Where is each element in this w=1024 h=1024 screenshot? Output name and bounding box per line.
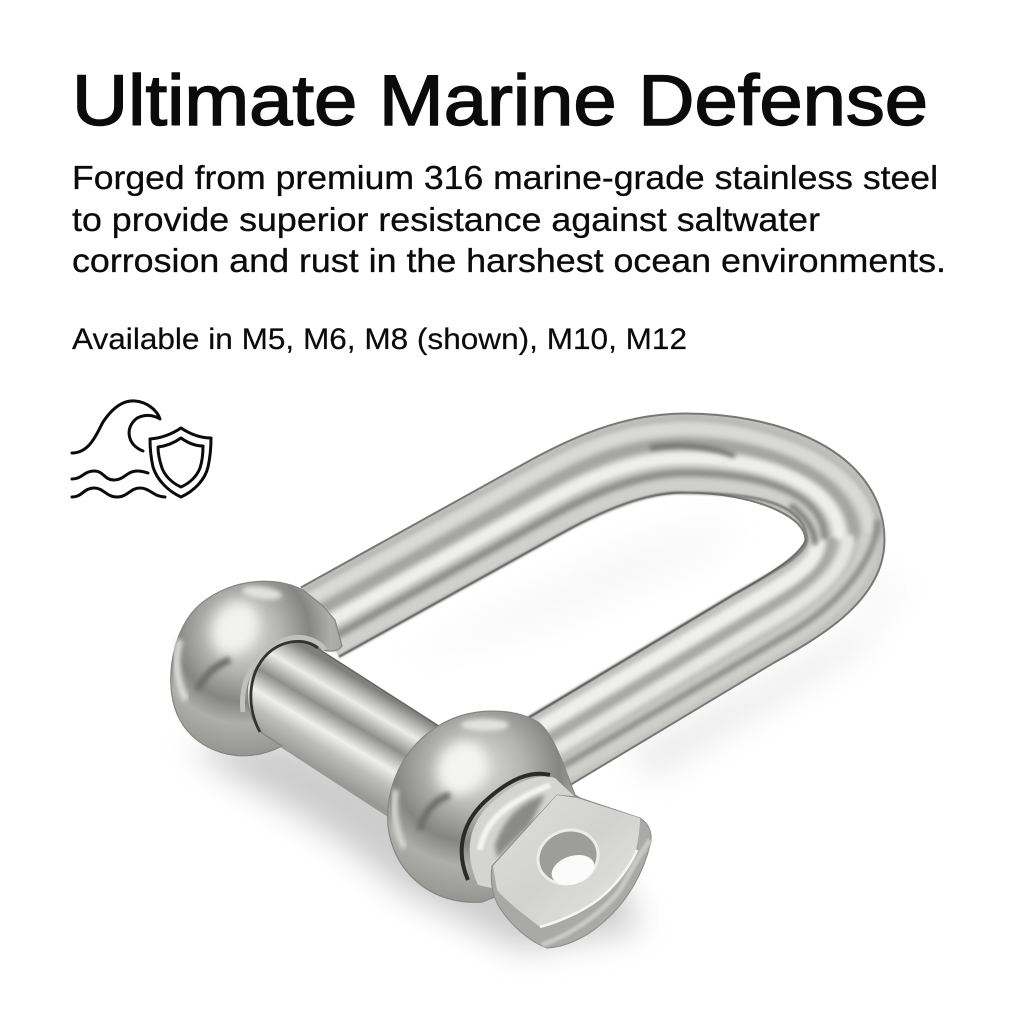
- shackle: eye plate: [491, 795, 651, 948]
- description text block: corrosion and rust in the harshest ocean environments.: [72, 242, 946, 279]
- title: Ultimate Marine Defense: [72, 62, 928, 141]
- bow inner edge: [339, 493, 807, 723]
- icon: wave and shield: [72, 401, 211, 497]
- shackle: right ball head: [388, 711, 600, 902]
- description text block: to provide superior resistance against saltwater: [72, 201, 820, 238]
- shackle cast shadow: [190, 525, 895, 950]
- shackle: threaded pin: [205, 613, 445, 817]
- description text block: [72, 159, 946, 279]
- dark ring at neck: [462, 774, 550, 880]
- available sizes: Available in M5, M6, M8 (shown), M10, M12: [72, 323, 687, 356]
- bow base tube: [320, 453, 845, 757]
- shackle: U-shaped bow: [304, 421, 878, 778]
- lower arm bands: [527, 520, 878, 778]
- shackle: left ball head: [171, 581, 342, 756]
- description text block: Forged from premium 316 marine-grade stainless steel: [72, 159, 938, 196]
- arch dark inner highlights: [650, 446, 815, 545]
- upper arm and arch bands: [304, 421, 877, 650]
- shackle: pin neck: [470, 777, 575, 890]
- eye hole: [528, 820, 608, 894]
